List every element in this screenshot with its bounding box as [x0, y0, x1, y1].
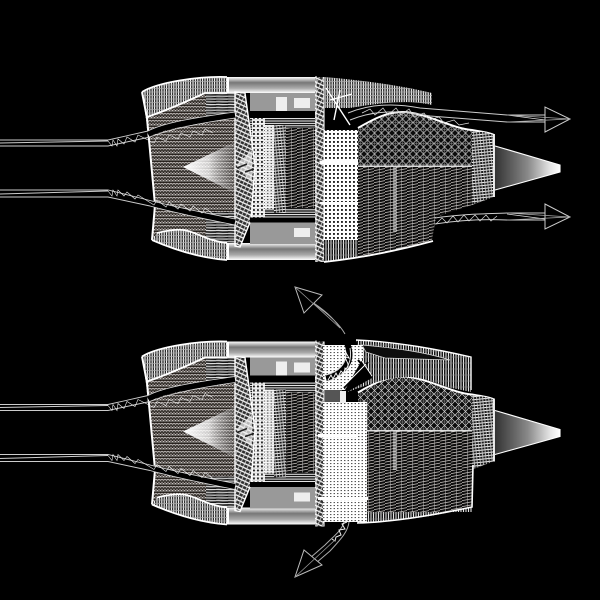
- engine front section: [0, 76, 324, 262]
- core and exhaust cone: [358, 376, 560, 522]
- core and exhaust cone: [358, 112, 560, 258]
- reverser linkage: [326, 88, 352, 125]
- translated rear nacelle bottom: [357, 465, 473, 523]
- top engine: forward thrust: [0, 76, 570, 262]
- upper rear nacelle: [324, 77, 432, 108]
- upper hot-stream arrow: [348, 105, 570, 132]
- upper reverse-flow arrow: [295, 287, 351, 381]
- cascade grid upper: [323, 345, 363, 390]
- engine front section: [0, 340, 324, 526]
- lower rear nacelle: [324, 240, 358, 262]
- translated rear nacelle top: [347, 340, 471, 392]
- bottom engine: reverse thrust: [0, 287, 560, 577]
- cascade grid main: [318, 402, 368, 522]
- reverser link arms: [344, 360, 372, 388]
- lower reverse-flow arrow: [295, 522, 349, 577]
- black linkage region: [325, 390, 342, 402]
- cascade grid: [320, 130, 358, 240]
- lower hot-stream arrow: [435, 204, 570, 229]
